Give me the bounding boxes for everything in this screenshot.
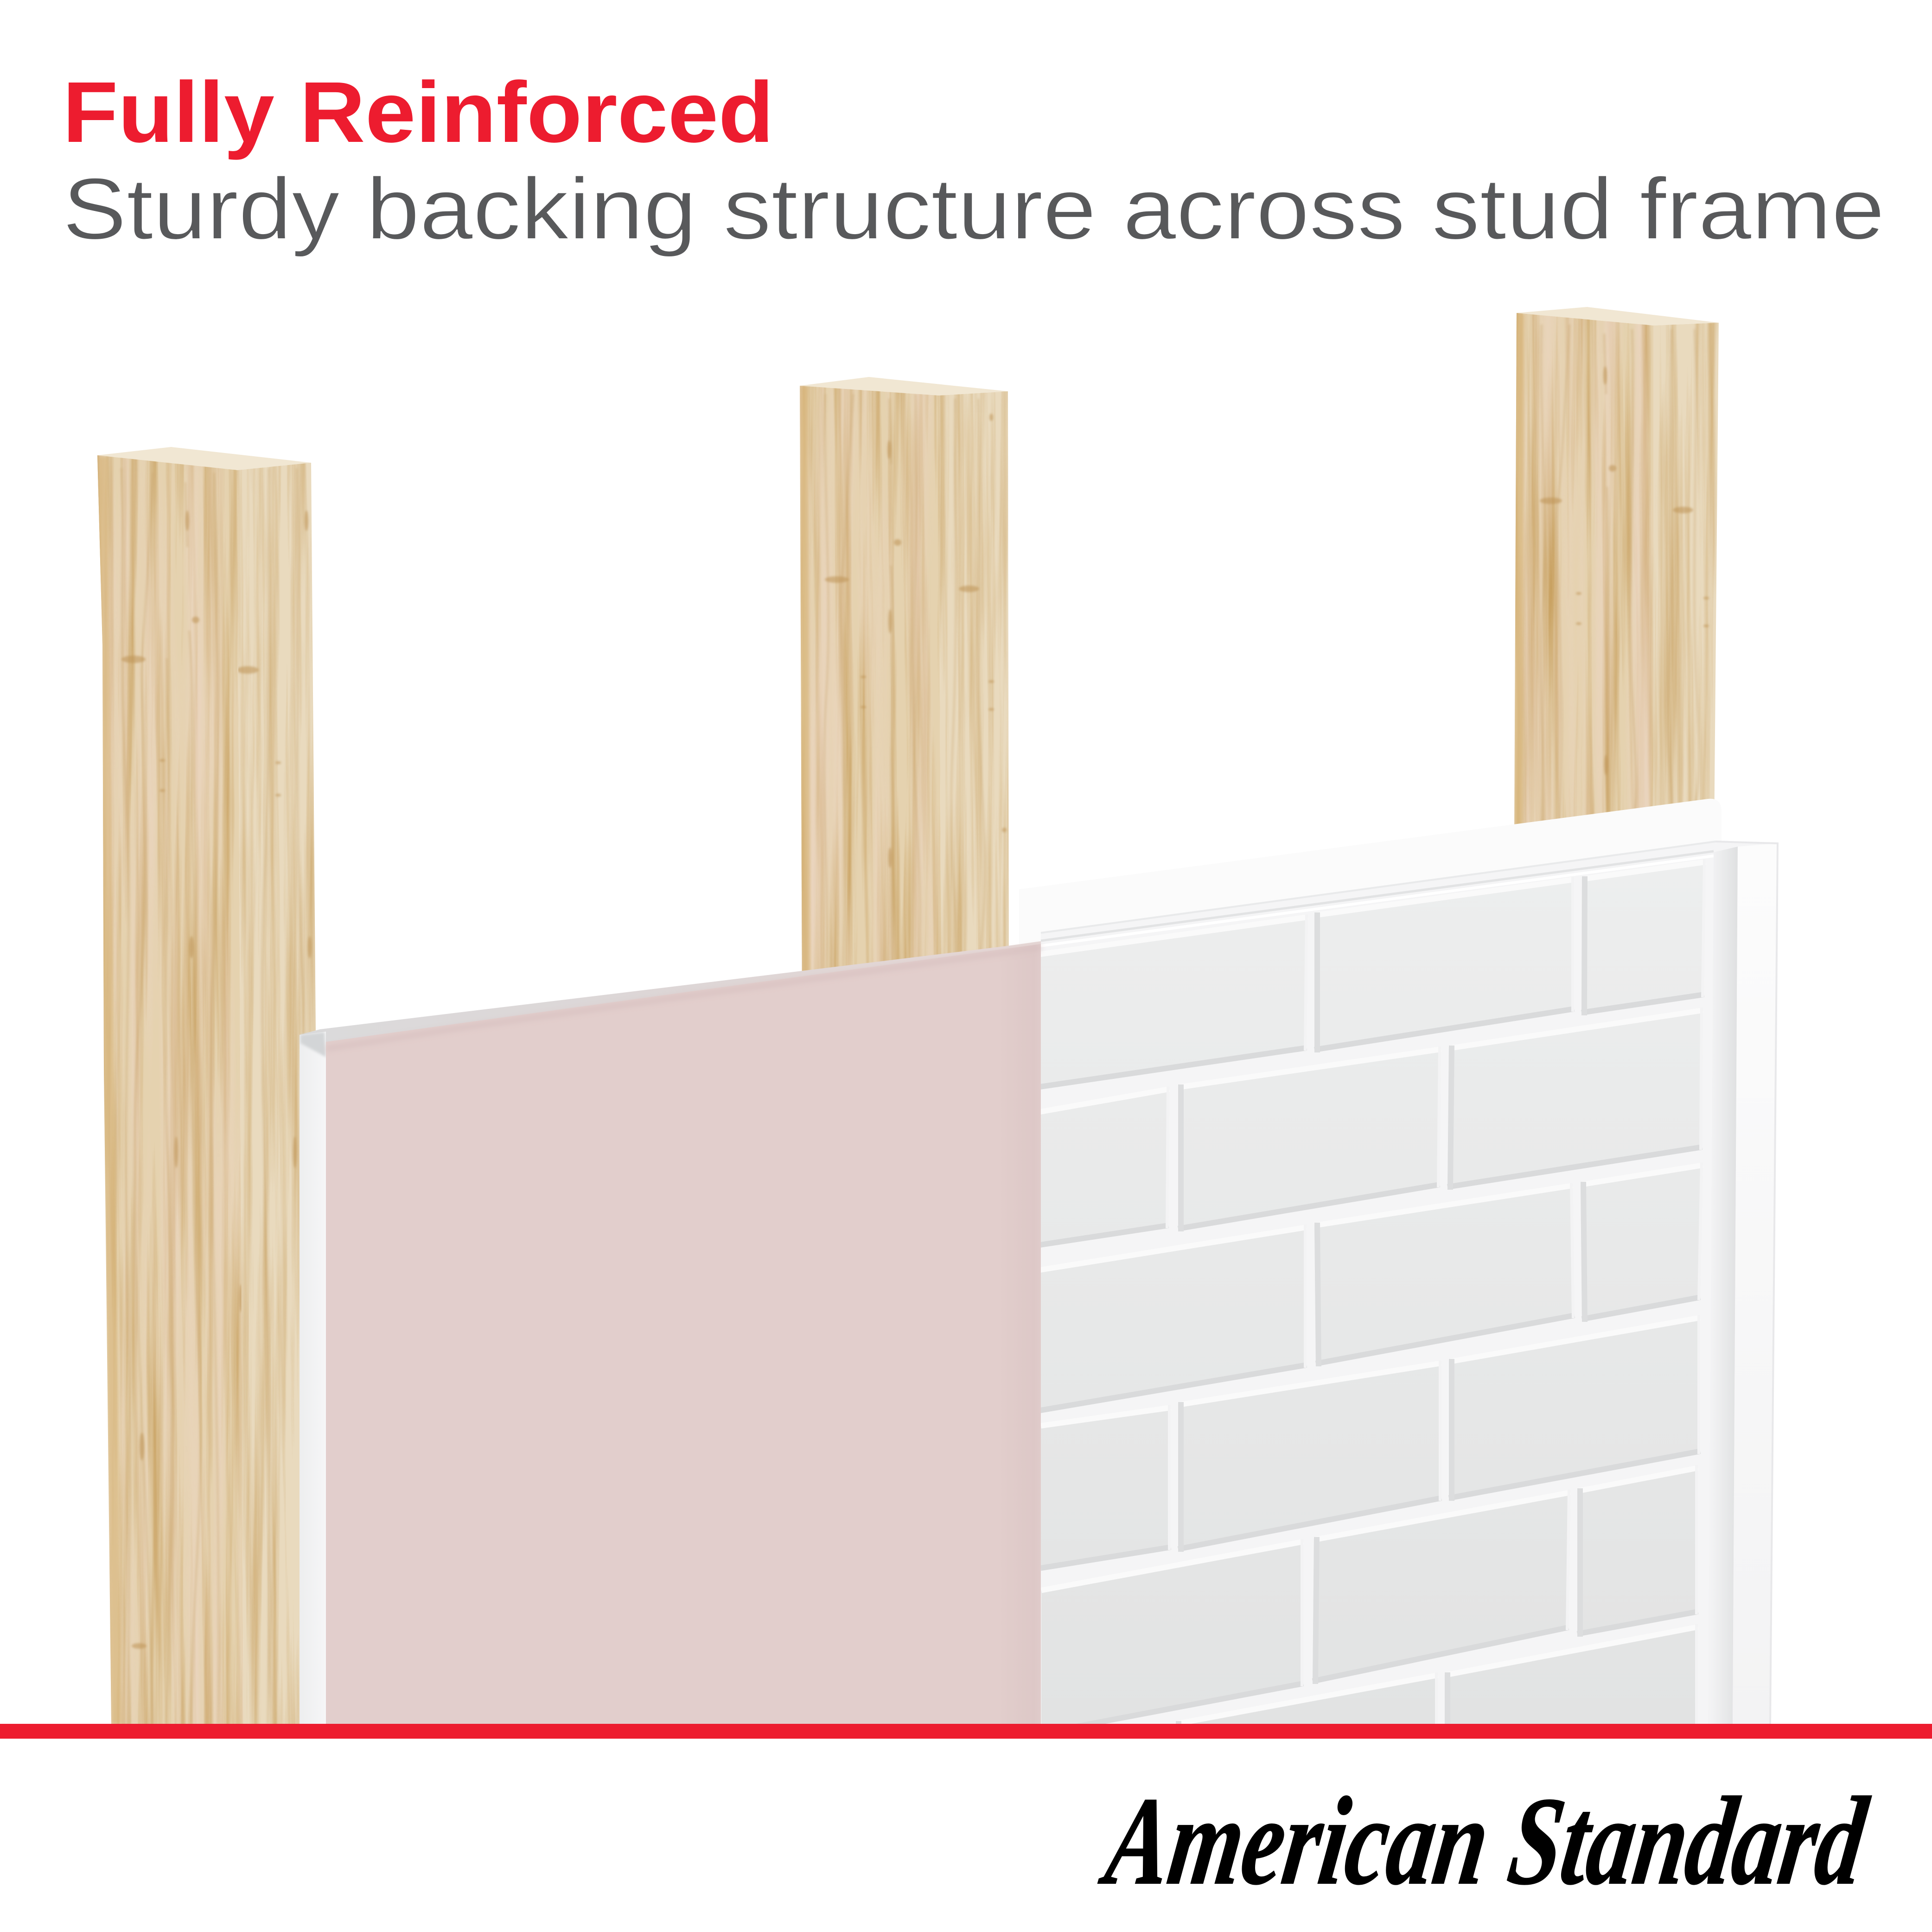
- pink face: [326, 944, 1041, 1724]
- board top edge: [300, 941, 1041, 1076]
- board white left edge: [300, 1032, 326, 1724]
- tile row 6: [1176, 1672, 1438, 1743]
- top molding: [1041, 842, 1715, 946]
- subtitle: Sturdy backing structure: Sturdy backing structure across stud frame: [63, 160, 1885, 257]
- tile row 3: [1040, 1224, 1307, 1413]
- title: Fully Reinforced: Fully Reinforced: [63, 64, 774, 160]
- tile row 1: [1040, 914, 1308, 1090]
- panel right return strip: [1733, 843, 1778, 1724]
- backing board: pink gypsum sheet: [300, 941, 1041, 1724]
- pink top soft crease: [326, 948, 1041, 1049]
- footer background: [0, 1739, 1932, 1932]
- wood stud: left: [93, 445, 325, 1725]
- wood stud: middle: [800, 377, 1009, 971]
- tile row 4: [1041, 1405, 1171, 1571]
- tile row 5: [1041, 1539, 1303, 1736]
- panel rear flange: [1019, 799, 1722, 1724]
- panel top-right edge line: [1715, 842, 1778, 1724]
- panel front face: [1041, 842, 1778, 1724]
- panel right groove: [1708, 847, 1738, 1724]
- red divider bar: [0, 1724, 1932, 1739]
- tile row 2: [1040, 1086, 1169, 1248]
- board corner shadow: [300, 1032, 326, 1057]
- wall panel: white surround and subway tiles: [1019, 799, 1778, 1743]
- wood stud: right: [1511, 306, 1720, 839]
- pink right edge tint: [997, 944, 1041, 1724]
